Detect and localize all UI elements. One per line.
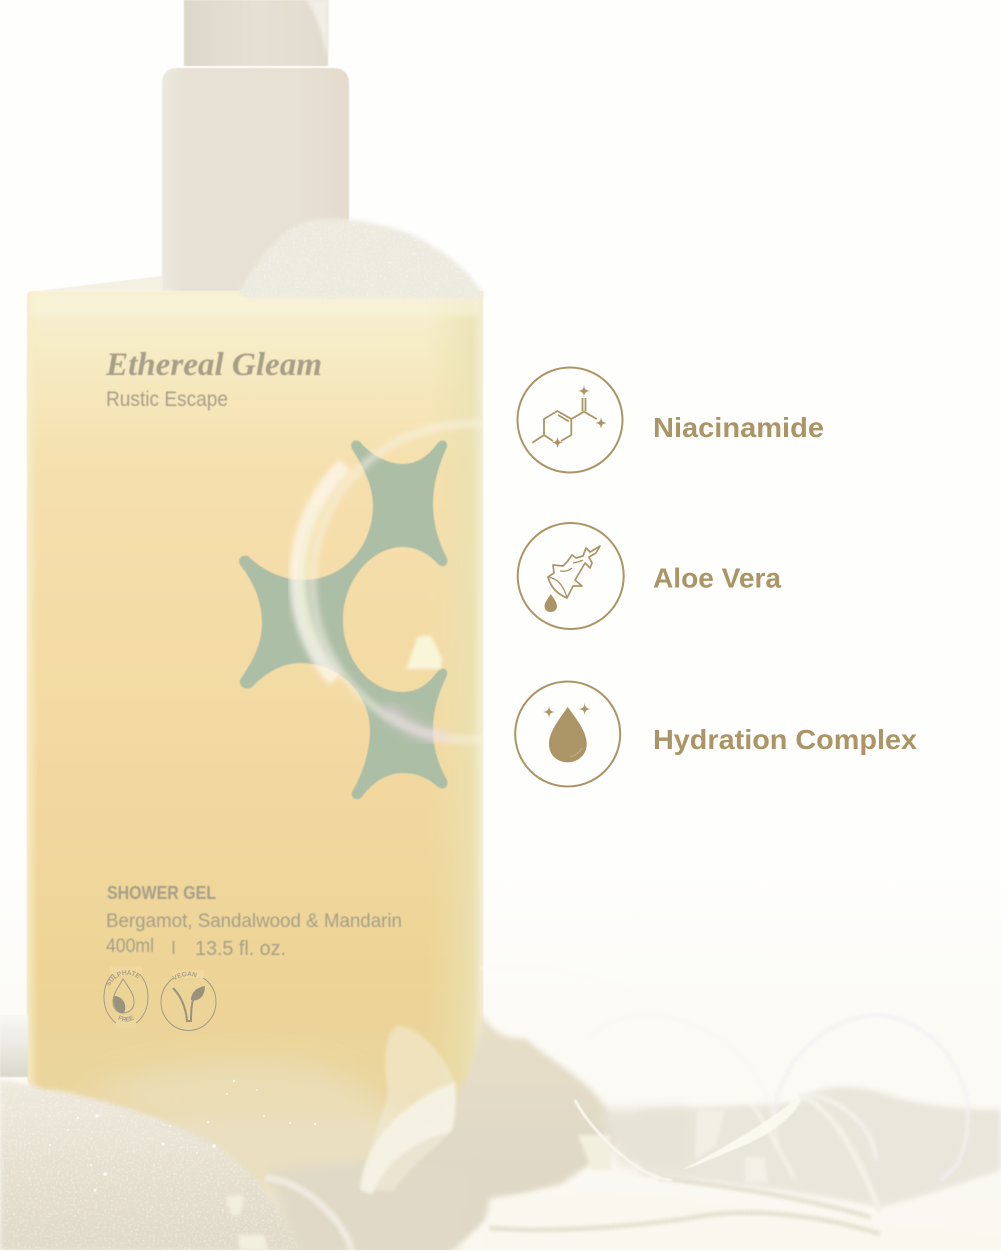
scent notes: Bergamot, Sandalwood & Mandarin [106,911,402,932]
bottle mark: sage star motif [239,440,447,799]
label: hydration complex: Hydration Complex [653,724,918,755]
ingredient: aloe vera [518,523,782,629]
bottom edge [0,1250,1001,1251]
product type: SHOWER GEL [107,883,216,903]
wet surface [480,1190,1001,1251]
volume [106,936,286,960]
product line: Rustic Escape [106,388,228,411]
foam band under bottle base [60,1120,430,1190]
icon: water drop with sparkles [515,682,620,786]
bottle body [27,276,483,1140]
left foam mound [0,1080,300,1251]
icon: niacinamide molecule [518,368,622,472]
foam on bottle shoulder [238,219,484,299]
translucent foam over bottle base [80,1061,450,1250]
ingredient: niacinamide [518,368,824,472]
left cloth [0,1015,28,1077]
suds lines on surface [490,1178,880,1234]
volume: 400ml [106,936,154,957]
central foam mound [299,1013,620,1251]
foam, cloth and bubbles at the base [0,967,1001,1251]
light block reflections [226,1110,767,1250]
badge: vegan [160,972,216,1031]
ingredient list [515,368,918,786]
soap bubbles [265,967,968,1251]
foam below bubbles [270,1162,470,1251]
product photo: bottle [26,0,524,1125]
ingredient: hydration complex [515,682,918,786]
cloth midsection shadow [600,1108,690,1170]
badge: sulphate free [104,970,148,1024]
label: niacinamide: Niacinamide [653,412,824,443]
label: aloe vera: Aloe Vera [653,562,782,594]
soap bubble over the mark [298,424,484,740]
product name: Ethereal Gleam [105,347,322,383]
pump stem [184,0,328,66]
badge: vegan: VEGAN [172,972,197,980]
volume: I [171,938,176,958]
icon: aloe leaf with drop [518,523,624,629]
volume: 13.5 fl. oz. [195,938,286,960]
badge: sulphate free: SULPHATE [106,970,140,986]
right cloth [640,1087,1001,1207]
glints on foam [49,1080,316,1192]
badge: sulphate free: FREE [118,1016,134,1022]
pump collar [162,68,349,291]
